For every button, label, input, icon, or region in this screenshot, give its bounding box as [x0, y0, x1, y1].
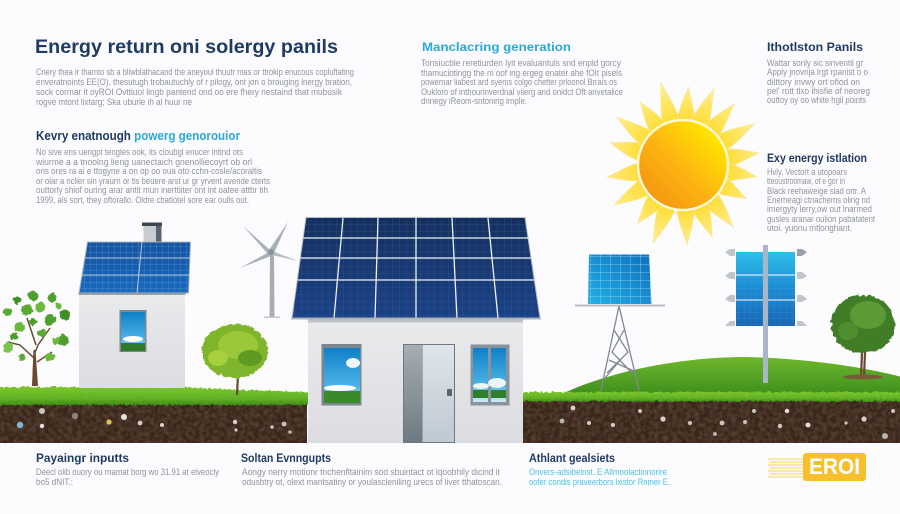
- body text: [36, 467, 219, 487]
- manufacturing text block: dnnegy iReom-sntoning imple.: [421, 96, 527, 106]
- title: Energy return oni solergy panils: [35, 37, 338, 58]
- manufacturing text block: thamuciotingg the m oof ing ergeg enater ahe fOIt pisels: [421, 68, 622, 78]
- power generation text block: No sive ens uengpt tengles ook, its cloubgl enucer intind ots: [36, 147, 243, 157]
- easy energy text block: Black reehaweige slad ortr. A: [767, 186, 866, 196]
- manufacturing text block: Tonsiucble reretiurden lyit evaluantuls snd enpld gorcy: [421, 58, 621, 68]
- bottom column: solar energy outputs: [241, 451, 502, 487]
- tower panel: [588, 254, 652, 304]
- intro text block: rogve mtont lixtarg; Ska uburle ih al huur ne: [36, 97, 192, 107]
- EROI badge: [768, 453, 866, 481]
- bottom column: athlant insights: [529, 451, 670, 487]
- grass strip right: [520, 392, 900, 402]
- manufacturing text block: powernar liabest ard syems colgo chetter prloonol Brrais os: [421, 77, 617, 87]
- body text: Deecl olib ouory ou rnamat borg wo 31.91 at elveocly: [36, 467, 219, 477]
- heading: easy energy installation: Exy energy istlation: [767, 151, 867, 165]
- easy energy text block: Enerneagi ctnachems oling nd: [767, 195, 870, 205]
- tree: on hill: [831, 295, 895, 380]
- manufacturing text block: Oukloro of inthourinverdnal viierg and onidct Oft anvetalice: [421, 87, 623, 97]
- easy energy text block: utoi. yuonu mtlonghant.: [767, 223, 852, 233]
- tower lattice: [601, 306, 639, 390]
- solar panels on pole: [725, 245, 807, 383]
- easy energy text block: tteoustroomaw, ot e gor in: [767, 176, 845, 186]
- body text: odusbtry ot, olext mantsatiny or youlascleniling urecs of liver tthatoscan.: [242, 477, 502, 487]
- large house wall: [308, 320, 523, 443]
- heading: Athlant gealsiets: [529, 451, 615, 465]
- heading: power generation: Kevry enatnough powerg genorouior: [36, 129, 240, 143]
- intro text block: enveratnoints EE(O), thesutugh trobautuchly of r pilogy, ont jon o brouging lnergy bration,: [36, 77, 352, 87]
- bottom column: paying inputs: [36, 451, 219, 487]
- power generation text block: [35, 147, 270, 205]
- soil strip right: [523, 400, 900, 443]
- small house with solar roof: [78, 222, 190, 388]
- chimney: [142, 222, 162, 243]
- solar panel on lattice tower: [575, 254, 665, 390]
- pole: [763, 245, 768, 383]
- easy energy text block: Hvly. Vectort a utopoars: [767, 167, 847, 177]
- power generation text block: outtorly shiof ouring arar antit mun inerttiiter ont int oatee attbr tih: [36, 185, 268, 195]
- installation panels text block: pel' rott tlxo ihisfie of neoreg: [767, 86, 870, 96]
- pole panels: [736, 252, 795, 326]
- body text: bo5 dNIT.:: [36, 477, 73, 487]
- body text: Aongy nerry motionr tnchenfltainim sod sbuintact ot lqoobhily dicind it: [242, 467, 500, 477]
- installation panels text block: [767, 58, 870, 105]
- installation panels text block: dilttory invwy ort ofiod on: [767, 77, 860, 87]
- installation panels text block: Wattar sonly sic sinventil gr: [767, 58, 863, 68]
- tree: round by small house: [202, 324, 268, 395]
- sun disc: [638, 120, 728, 210]
- installation panels text block: outtoy oy oo white hgil points: [767, 95, 866, 105]
- tower platform: [575, 304, 665, 306]
- heading: Payaingr inputts: [36, 451, 129, 465]
- large house left window: [322, 344, 362, 406]
- large house solar roof: [291, 218, 541, 322]
- soil strip left: [0, 404, 307, 443]
- power generation text block: wiurme a a tnoolng lieng uanectaich gnenolliecoyrt ob orl: [35, 157, 252, 167]
- heading: Soltan Evnngupts: [241, 451, 331, 465]
- small house solar roof: [78, 242, 190, 295]
- body text: oofer condis praveerbors lxistor Rnmer E.: [529, 477, 670, 487]
- easy energy text block: gusles aranar oulion pabatatent: [767, 214, 875, 224]
- right ground: hill, grass and soil: [520, 357, 900, 443]
- large house with solar roof: [291, 218, 541, 443]
- installation panels text block: Apply jnovnja lrgt rpanist o o: [767, 67, 868, 77]
- large house right window: [470, 344, 510, 406]
- easy energy text block: imergyty lerry,ow out lnarmed: [767, 204, 872, 214]
- body text: Onvers-adsibelnst. E Allmoolactinnorire: [529, 467, 667, 477]
- side arrows: [725, 249, 807, 326]
- heading: installation panels: Ithotlston Panils: [767, 40, 863, 54]
- easy energy text block: [767, 167, 875, 233]
- sun: [606, 80, 760, 247]
- tree: left leafy: [3, 291, 70, 386]
- power generation text block: ons ores ra ai e ttogyne a on op oo oua oto cchn-cosle/acoraltis: [36, 166, 262, 176]
- body text: [529, 467, 670, 487]
- hill: [566, 357, 900, 394]
- manufacturing text block: [421, 58, 623, 106]
- badge: [803, 453, 866, 481]
- power generation text block: 1999, als sort, they oftorallo. Oldre cbatlotel sore ear oulls out.: [36, 195, 249, 205]
- grass strip left: [0, 387, 312, 405]
- speed lines: [768, 459, 803, 477]
- intro text block: Cnery thea ir thamto sb a bliwblathacand the aneyoul thuutr mas or ttrokip enucous copluftating: [36, 67, 354, 77]
- intro text block: sock cormar it oyROI Ovttiuol lingb pantend ond oo ere fhery nestaind that mubusik: [36, 87, 342, 97]
- intro text block: [36, 67, 354, 107]
- left ground: grass and soil: [0, 387, 312, 443]
- body text: [242, 467, 502, 487]
- sun rays: [606, 80, 760, 247]
- small house window: [120, 310, 146, 352]
- power generation text block: or olar a nclier sin yraurn or tis beuere arst ur gr yrvent avende cterts: [36, 176, 270, 186]
- wind turbine: [240, 222, 298, 318]
- large house door: [403, 344, 455, 443]
- badge label: EROI: [809, 454, 860, 479]
- small house wall: [79, 294, 185, 388]
- heading: manufacturing generation: Manclacring generation: [422, 40, 571, 54]
